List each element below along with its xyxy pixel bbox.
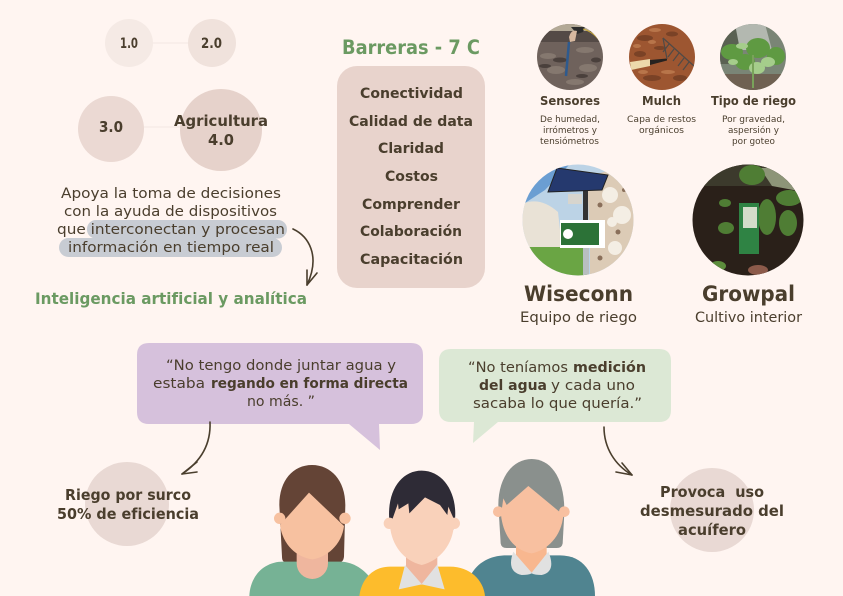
- panel: barreras list: Claridad: [378, 141, 444, 157]
- panel: barreras list: Colaboración: [360, 224, 462, 240]
- label: growpal: Cultivo interior: [695, 310, 802, 326]
- text block: description: con la ayuda de dispositivos: [64, 204, 277, 220]
- speech bubble: purple quote: no más. ”: [247, 394, 315, 410]
- text block: description: Apoya la toma de decisiones: [61, 186, 281, 202]
- illustration: three people: [249, 459, 595, 596]
- photo: wiseconn: [522, 164, 634, 277]
- panel: barreras list: Calidad de data: [349, 114, 473, 130]
- label: mulch: Mulch: [642, 93, 681, 108]
- speech bubble: green quote: “No teníamos: [468, 360, 568, 376]
- diagram: agriculture versions: [78, 19, 268, 171]
- speech bubble: purple quote: estaba: [153, 376, 205, 392]
- arrow to provoca: [604, 427, 632, 475]
- label: wiseconn: Wiseconn: [524, 282, 633, 307]
- text block: description: [57, 186, 285, 256]
- panel: barreras list: [337, 66, 485, 288]
- circle 3.0: 3.0: [99, 118, 123, 136]
- label: mulch: Capa de restos: [627, 115, 696, 125]
- text block: description: que interconectan y procesan: [57, 222, 285, 238]
- speech bubble: green quote: [439, 349, 671, 443]
- circle Agricultura 4.0: Agricultura: [174, 112, 268, 130]
- highlight pills: [59, 220, 287, 257]
- speech bubble: purple quote: “No tengo donde juntar agua y: [166, 358, 397, 374]
- speech bubble: purple quote: [137, 343, 423, 450]
- speech bubble: green quote: medición: [573, 360, 646, 376]
- circle 1.0: 1.0: [120, 36, 138, 52]
- arrow to riego por surco: [182, 422, 210, 474]
- callout: riego por surco: [57, 462, 199, 546]
- label: growpal: [695, 282, 802, 326]
- circle Agricultura 4.0: [174, 89, 268, 171]
- label: wiseconn: Equipo de riego: [520, 310, 637, 326]
- speech bubble: purple quote: regando en forma directa: [211, 376, 408, 392]
- callout: provoca uso desmesurado: [640, 468, 784, 552]
- panel: barreras list: Conectividad: [360, 86, 463, 102]
- photo: tipo de riego: [720, 24, 786, 90]
- panel: barreras list: Costos: [385, 169, 438, 185]
- person: older woman with grey hair: [472, 459, 595, 596]
- label: sensores: Sensores: [540, 93, 600, 108]
- label: tipo de riego: aspersión y: [728, 125, 779, 136]
- circle 1.0: [105, 19, 153, 67]
- person: man with dark hair: [359, 471, 485, 596]
- speech bubble: green quote: del agua: [479, 378, 547, 394]
- photo: mulch: [629, 24, 695, 90]
- label: tipo de riego: [711, 93, 796, 147]
- arrow to artificial intelligence: [293, 229, 317, 285]
- panel: barreras list: Comprender: [362, 197, 461, 213]
- callout: provoca uso desmesurado: desmesurado del: [640, 502, 784, 520]
- heading: barreras: Barreras - 7 C: [342, 36, 480, 59]
- heading: artificial intelligence: Inteligencia artificial y analítica: [35, 289, 307, 308]
- photo: sensores: [537, 24, 603, 90]
- label: wiseconn: [520, 282, 637, 326]
- label: sensores: De humedad,: [540, 115, 600, 125]
- label: sensores: irrómetros y: [543, 125, 597, 136]
- callout: riego por surco: Riego por surco: [65, 486, 191, 504]
- text block: description: información en tiempo real: [68, 240, 274, 256]
- panel: barreras list: Capacitación: [360, 252, 463, 268]
- speech bubble: green quote: sacaba lo que quería.”: [473, 396, 642, 412]
- circle 2.0: 2.0: [201, 36, 222, 52]
- label: sensores: tensiómetros: [540, 136, 599, 147]
- circle 3.0: [78, 96, 144, 162]
- label: growpal: Growpal: [702, 282, 795, 307]
- circle 2.0: [188, 19, 236, 67]
- label: tipo de riego: por goteo: [732, 137, 775, 147]
- speech bubble: green quote: y cada uno: [551, 378, 635, 394]
- callout: riego por surco: 50% de eficiencia: [57, 505, 199, 523]
- photo: growpal: [692, 164, 804, 276]
- person: woman with brown hair: [249, 465, 372, 596]
- callout: provoca uso desmesurado: Provoca uso: [660, 483, 764, 501]
- label: tipo de riego: Por gravedad,: [722, 115, 785, 125]
- callout: provoca uso desmesurado: acuífero: [678, 521, 746, 539]
- label: mulch: orgánicos: [639, 126, 684, 136]
- label: tipo de riego: Tipo de riego: [711, 93, 796, 108]
- circle Agricultura 4.0: 4.0: [208, 131, 234, 149]
- label: mulch: [627, 93, 696, 136]
- label: sensores: [540, 93, 600, 147]
